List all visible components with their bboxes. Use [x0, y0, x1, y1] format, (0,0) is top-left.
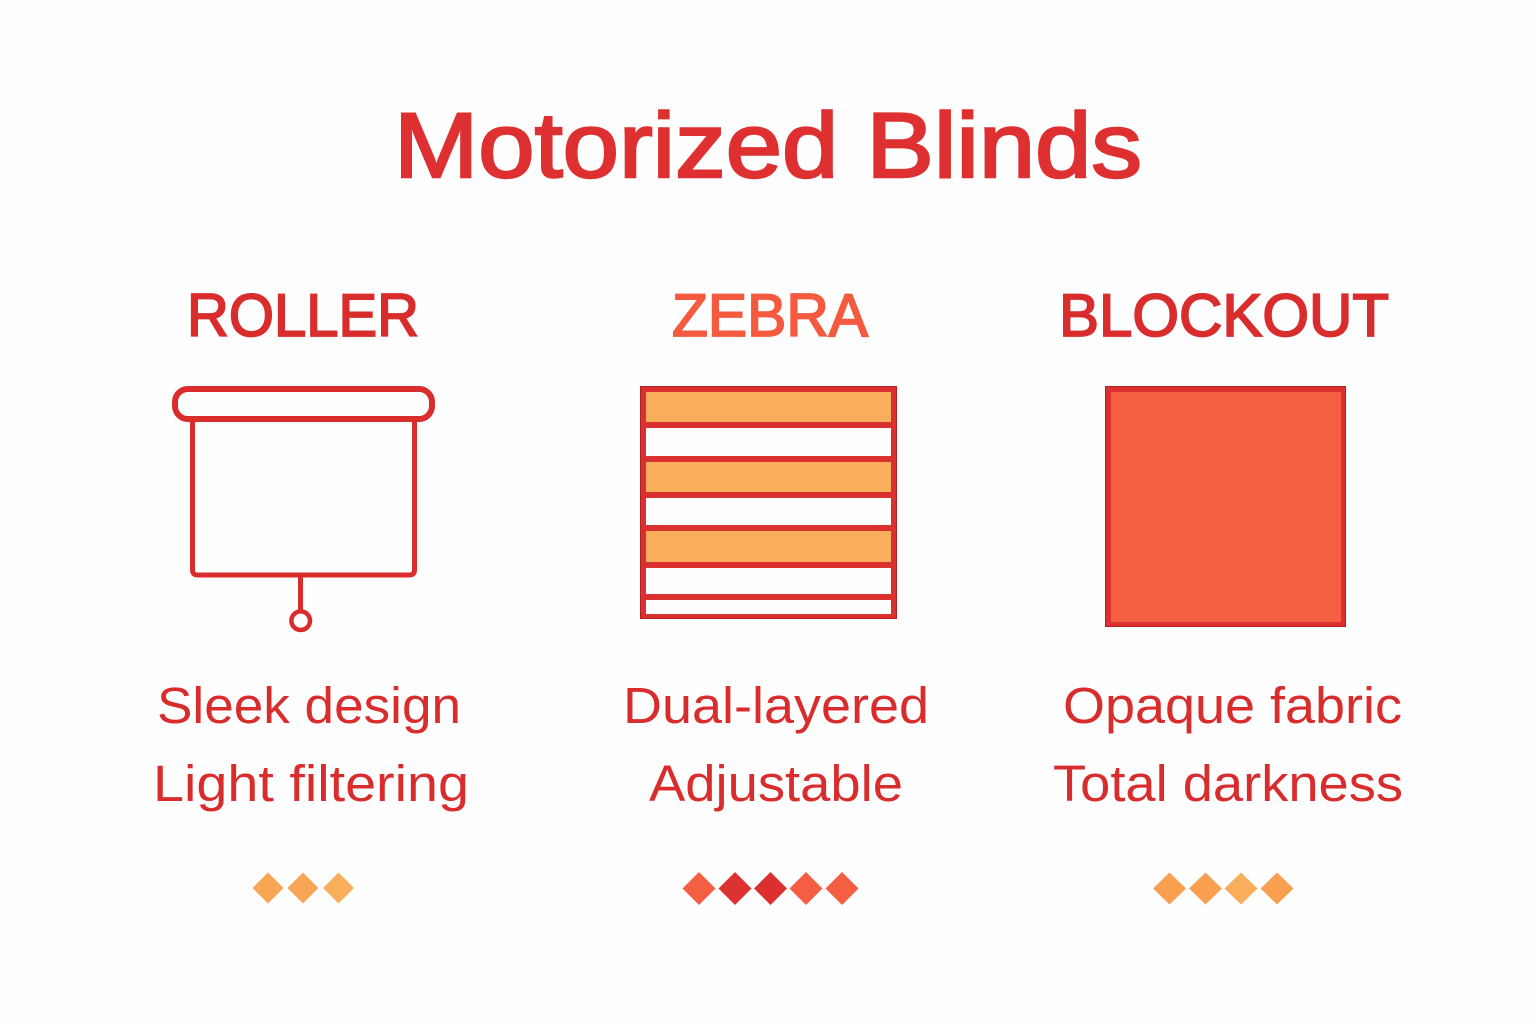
text: zebra features: Dual-layered — [623, 677, 929, 734]
text: roller features: Light filtering — [153, 755, 469, 812]
heading: roller: ROLLER — [187, 282, 419, 349]
text: blockout features: Opaque fabric — [1063, 677, 1402, 734]
heading: blockout: BLOCKOUT — [1059, 282, 1389, 349]
text: roller features — [153, 677, 469, 812]
text: roller features: Sleek design — [157, 677, 461, 734]
icon: roller blind — [175, 389, 432, 630]
text: zebra features — [623, 677, 929, 812]
text: blockout features: Total darkness — [1053, 755, 1403, 812]
text: blockout features — [1053, 677, 1403, 812]
rating: four diamonds — [1153, 872, 1294, 904]
text: zebra features: Adjustable — [649, 755, 903, 812]
title: Motorized Blinds — [394, 95, 1142, 197]
panel: roller — [153, 282, 469, 904]
heading: zebra: ZEBRA — [672, 282, 868, 349]
panel: zebra — [623, 282, 929, 905]
rating: three diamonds — [252, 872, 354, 904]
icon: zebra blind — [640, 386, 896, 618]
panel: blockout — [1053, 282, 1403, 904]
icon: blockout blind — [1106, 386, 1346, 626]
rating: five diamonds — [682, 872, 858, 905]
